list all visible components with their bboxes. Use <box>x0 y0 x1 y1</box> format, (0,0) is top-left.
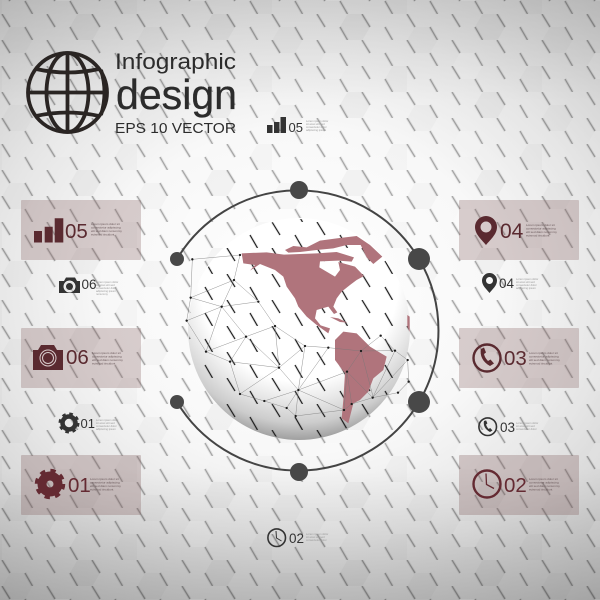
small item: pin 04 <box>482 273 538 293</box>
panel: 06 left <box>21 328 141 388</box>
panel: 01 left: euismod tincidunt <box>90 488 114 492</box>
small item: gear 01: Lorem ipsum dolor <box>96 418 118 422</box>
small item: camera 06: 06 <box>82 277 97 292</box>
panel: 02 right: 02 <box>504 474 527 497</box>
small item: pin 04: Lorem ipsum dolor <box>516 277 538 281</box>
panel: 03 right: Lorem ipsum dolor sit <box>529 351 558 355</box>
panel: 03 right: elit sed diam nonummy <box>529 358 560 362</box>
small item: bars 05: consectetur dolor <box>306 125 327 129</box>
title: design <box>116 71 237 118</box>
title: Infographic <box>115 49 236 74</box>
panel: 01 left: Lorem ipsum dolor sit <box>90 477 119 481</box>
panel: 04 right: consectetur adipiscing <box>526 226 556 230</box>
small item: phone 03: 03 <box>500 420 515 435</box>
small item: clock 02: 02 <box>289 531 304 546</box>
small item: clock 02: Lorem ipsum dolor <box>306 532 328 536</box>
small item: pin 04: consectetur dolor <box>516 283 537 287</box>
panel: 06 left: euismod tincidunt <box>92 362 116 366</box>
small item: bars 05: adipiscing ipsum <box>306 128 327 132</box>
panel: 03 right: 03 <box>504 347 527 370</box>
globe <box>185 215 415 445</box>
panel: 02 right: euismod tincidunt <box>529 488 553 492</box>
panel: 02 right: consectetur adipiscing <box>529 480 559 484</box>
small item: clock 02: consectetur dolor <box>306 538 327 542</box>
panel: 04 right <box>459 200 579 260</box>
panel: 03 right: euismod tincidunt <box>529 362 553 366</box>
panel: 01 left: consectetur adipiscing <box>90 480 120 484</box>
small item: pin 04: sit amet elit sed <box>516 280 535 284</box>
small item: gear 01: 01 <box>80 416 95 431</box>
small item: phone 03: sit amet elit sed <box>516 424 535 428</box>
small item: bars 05: sit amet elit sed <box>306 122 325 126</box>
title: EPS 10 VECTOR <box>115 121 236 137</box>
panel: 01 left: elit sed diam nonummy <box>90 484 121 488</box>
panel: 04 right: Lorem ipsum dolor sit <box>526 223 555 227</box>
small item: camera 06: sit amet elit sed <box>96 283 115 287</box>
panel: 03 right <box>459 328 579 388</box>
panel: 01 left <box>21 455 141 515</box>
continents <box>242 236 410 423</box>
globe logo icon <box>28 53 107 132</box>
globe sphere <box>188 218 410 440</box>
panel: 02 right <box>459 455 579 515</box>
panel: 05 left: 05 <box>65 220 88 243</box>
network lines and dots <box>185 254 410 417</box>
title <box>115 49 237 137</box>
orbit ring with nodes <box>170 181 438 481</box>
panel: 04 right: elit sed diam nonummy <box>526 230 557 234</box>
small item: phone 03: consectetur dolor <box>516 427 537 431</box>
small item: gear 01 <box>60 414 118 432</box>
panel: 02 right: Lorem ipsum dolor sit <box>529 477 558 481</box>
small item: bars 05: Lorem ipsum dolor <box>306 119 328 123</box>
small item: bars 05: 05 <box>288 120 303 135</box>
panel: 06 left: Lorem ipsum dolor sit <box>92 351 121 355</box>
small item: gear 01: adipiscing ipsum <box>96 427 117 431</box>
small item: gear 01: sit amet elit sed <box>96 421 115 425</box>
panel: 04 right: 04 <box>500 220 524 243</box>
panel: 05 left: consectetur adipiscing <box>91 226 121 230</box>
panel: 06 left: consectetur adipiscing <box>92 354 122 358</box>
small item: clock 02: sit amet elit sed <box>306 535 325 539</box>
small item: pin 04: adipiscing ipsum <box>516 286 537 290</box>
dark hex edges on globe <box>185 215 415 445</box>
small item: camera 06: consectetur dolor <box>96 286 117 290</box>
small item: phone 03 <box>479 418 538 436</box>
panel: 06 left: elit sed diam nonummy <box>92 358 123 362</box>
small item: bars 05 <box>267 117 328 135</box>
panel: 05 left: elit sed diam nonummy <box>91 229 122 233</box>
panel: 05 left: euismod tincidunt <box>91 232 115 236</box>
panel: 05 left: Lorem ipsum dolor sit <box>91 222 120 226</box>
panel: 03 right: consectetur adipiscing <box>529 354 559 358</box>
panel: 02 right: elit sed diam nonummy <box>529 484 560 488</box>
small item: phone 03: Lorem ipsum dolor <box>516 421 538 425</box>
small item: camera 06: Lorem ipsum dolor <box>96 280 118 284</box>
small item: camera 06: nonummy <box>96 293 108 296</box>
panel: 04 right: euismod tincidunt <box>526 234 550 238</box>
panel: 05 left <box>21 200 141 260</box>
small item: gear 01: consectetur dolor <box>96 424 117 428</box>
panel: 01 left: 01 <box>68 474 91 497</box>
small item: camera 06: adipiscing ipsum <box>96 289 117 293</box>
panel: 06 left: 06 <box>66 346 89 369</box>
small item: camera 06 <box>59 277 118 296</box>
small item: clock 02 <box>268 529 328 546</box>
small item: pin 04: 04 <box>499 276 515 291</box>
